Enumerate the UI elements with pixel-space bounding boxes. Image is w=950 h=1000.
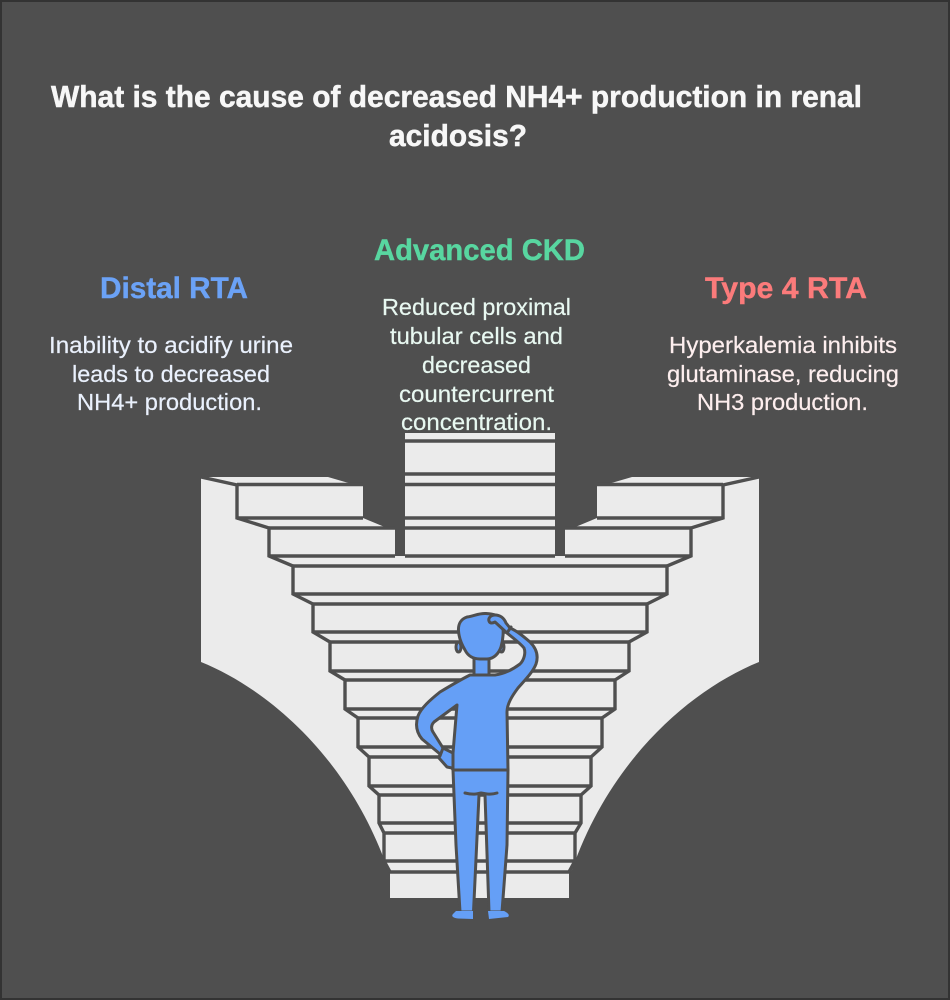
text block: Advanced CKD description: Reduced proximal	[382, 294, 571, 320]
panel: Advanced CKD	[374, 234, 585, 435]
heading: Type 4 RTA: Type 4 RTA	[705, 272, 867, 305]
heading: Advanced CKD: Advanced CKD	[374, 234, 585, 267]
text block: Distal RTA description	[49, 332, 293, 415]
figure: person scratching head	[417, 613, 537, 919]
text block: Advanced CKD description	[382, 294, 571, 435]
heading: Distal RTA: Distal RTA	[100, 272, 248, 305]
title: What is the cause of decreased NH4+ production in renal	[51, 79, 862, 114]
text block: Advanced CKD description: countercurrent	[399, 381, 554, 407]
text block: Type 4 RTA description: glutaminase, reducing	[667, 361, 899, 387]
icon: body and arms	[417, 615, 537, 912]
text block: Advanced CKD description: concentration.	[401, 409, 552, 435]
text block: Distal RTA description: NH4+ production.	[77, 389, 262, 415]
icon: neck	[474, 657, 489, 675]
icon: belt, waist and wrist lines	[440, 627, 511, 794]
text block: Type 4 RTA description: Hyperkalemia inhibits	[669, 332, 897, 358]
title: acidosis?	[389, 118, 527, 153]
text block: Distal RTA description: Inability to acidify urine	[49, 332, 293, 358]
text block: Advanced CKD description: decreased	[422, 352, 531, 378]
panel: Distal RTA	[49, 272, 293, 415]
icon: head	[458, 613, 503, 659]
icon: feet	[452, 911, 509, 919]
text block: Type 4 RTA description: NH3 production.	[697, 389, 868, 415]
text block: Distal RTA description: leads to decreased	[72, 361, 270, 387]
staircase funnel	[201, 433, 759, 898]
text block: Type 4 RTA description	[667, 332, 899, 415]
panel: Type 4 RTA	[667, 272, 899, 415]
icon: ears	[456, 642, 504, 652]
title	[51, 79, 862, 153]
text block: Advanced CKD description: tubular cells and	[390, 323, 563, 349]
